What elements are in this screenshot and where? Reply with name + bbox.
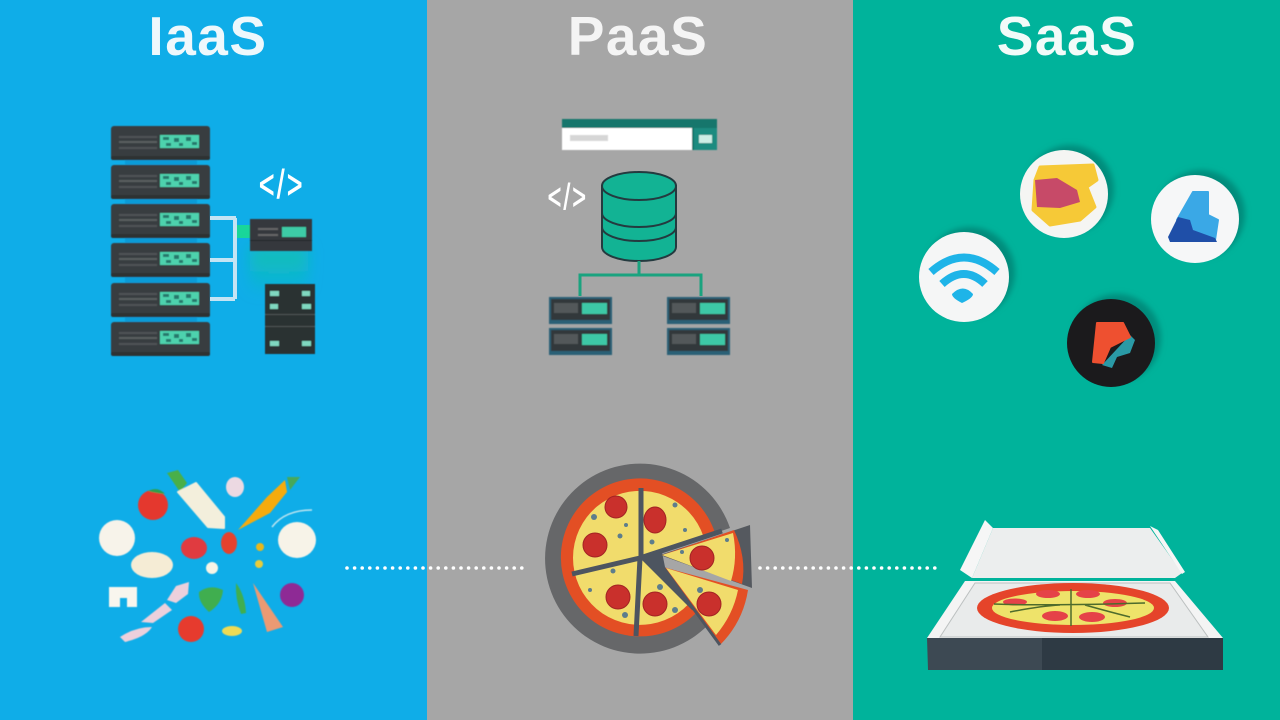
icon: code symbol: </>	[548, 178, 588, 217]
heading: PaaS: PaaS	[568, 5, 708, 67]
connector lines	[210, 218, 236, 299]
icon: yellow and red app	[1020, 150, 1108, 238]
ingredients	[99, 470, 316, 642]
pan	[545, 464, 730, 654]
teal glow link	[237, 225, 308, 292]
slice cuts	[572, 488, 722, 636]
server pair left	[549, 297, 612, 355]
connector lines	[580, 261, 701, 296]
dotted arrow right	[760, 566, 942, 570]
icon: blue app	[1151, 175, 1239, 263]
box base	[927, 581, 1223, 638]
network unit	[250, 219, 312, 251]
main pizza crust	[561, 478, 715, 636]
icon: wifi	[919, 232, 1009, 322]
heading: SaaS: SaaS	[997, 5, 1137, 67]
rack unit	[265, 284, 315, 354]
toppings	[588, 502, 729, 618]
slice right	[660, 525, 752, 588]
centre wedge	[640, 552, 699, 612]
heading: IaaS: IaaS	[148, 5, 268, 67]
icon: dark P app	[1067, 299, 1155, 387]
dotted arrow left	[347, 566, 528, 570]
box front	[927, 638, 1042, 670]
box lid	[972, 528, 1182, 578]
server pair right	[667, 297, 730, 355]
slice lower right	[663, 567, 748, 645]
main pizza cheese	[573, 491, 704, 625]
panel: PaaS	[427, 0, 853, 720]
lid flaps	[960, 520, 1185, 578]
panel: SaaS	[853, 0, 1280, 720]
icon: code symbol: </>	[259, 163, 305, 207]
panel: IaaS	[0, 0, 427, 720]
pizza sliced	[545, 464, 752, 654]
pepperoni	[583, 496, 721, 616]
app shadows	[925, 145, 1245, 382]
boxed pizza	[977, 583, 1169, 633]
pizza box	[927, 520, 1223, 670]
database	[602, 172, 676, 261]
server stack	[111, 126, 210, 356]
app window	[562, 119, 717, 150]
